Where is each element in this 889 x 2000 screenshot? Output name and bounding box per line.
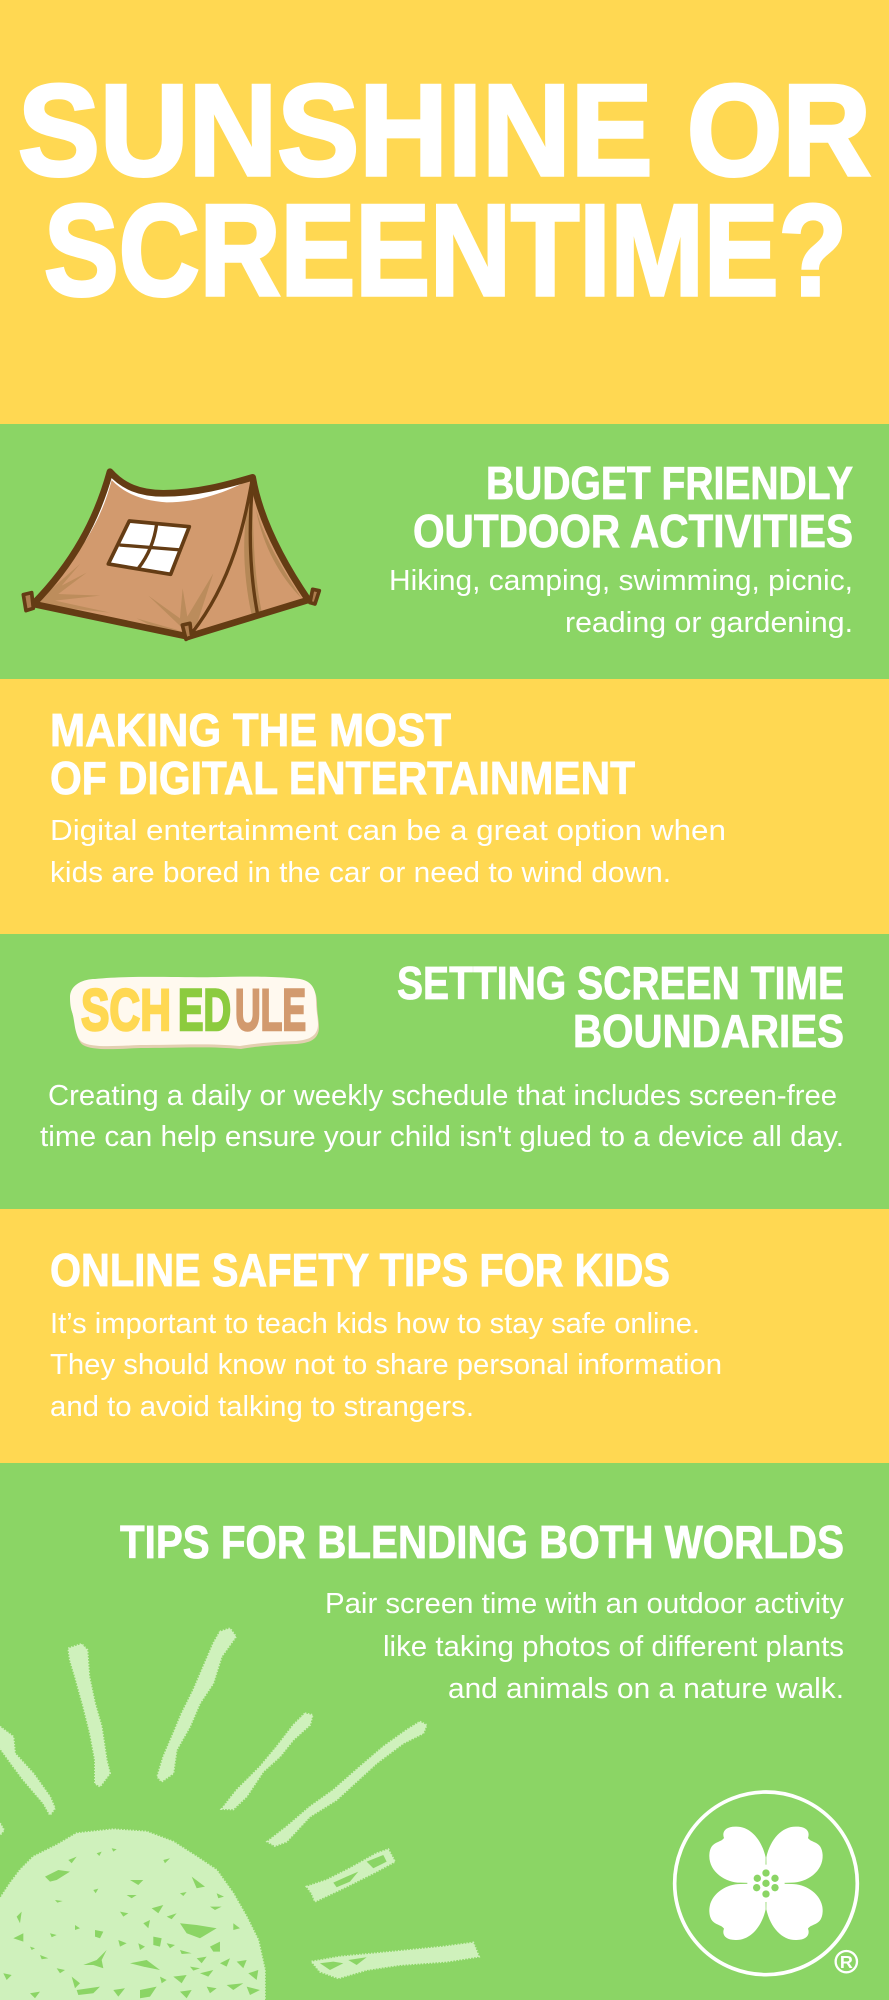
text block: like taking photos of different plants bbox=[383, 1631, 844, 1663]
text block: They should know not to share personal information bbox=[50, 1349, 722, 1381]
text block: and to avoid talking to strangers. bbox=[50, 1391, 474, 1423]
text block: and animals on a nature walk. bbox=[448, 1673, 844, 1705]
panel: title band bbox=[0, 0, 889, 424]
heading bbox=[50, 704, 635, 804]
heading: ONLINE SAFETY TIPS FOR KIDS bbox=[50, 1244, 670, 1296]
flower bbox=[709, 1827, 823, 1940]
text block: reading or gardening. bbox=[565, 607, 853, 639]
panel: tips for blending both worlds bbox=[0, 1463, 889, 2000]
icon: chalk sun bbox=[0, 1628, 479, 2000]
heading bbox=[397, 957, 844, 1057]
icon: schedule sticker: ULE bbox=[235, 978, 306, 1043]
icon: schedule sticker bbox=[70, 977, 319, 1049]
title bbox=[18, 57, 871, 323]
panel: budget friendly outdoor activities bbox=[0, 424, 889, 679]
text block: time can help ensure your child isn't glued to a device all day. bbox=[40, 1121, 844, 1153]
text block bbox=[40, 1080, 844, 1153]
heading: BOUNDARIES bbox=[573, 1005, 844, 1057]
text block: Hiking, camping, swimming, picnic, bbox=[389, 565, 853, 597]
icon: tent bbox=[23, 472, 319, 639]
icon: schedule sticker: ED bbox=[178, 978, 231, 1043]
registered mark bbox=[836, 1951, 857, 1972]
text block bbox=[389, 565, 853, 639]
text block: kids are bored in the car or need to wind down. bbox=[50, 857, 671, 889]
text block bbox=[325, 1588, 844, 1705]
text block: Pair screen time with an outdoor activity bbox=[325, 1588, 844, 1620]
flower centre dots bbox=[753, 1869, 779, 1898]
heading bbox=[413, 457, 853, 557]
panel: making the most of digital entertainment bbox=[0, 679, 889, 934]
text block: Digital entertainment can be a great option when bbox=[50, 815, 726, 847]
panel: setting screen time boundaries bbox=[0, 934, 889, 1209]
text block bbox=[50, 1308, 722, 1423]
text block: Creating a daily or weekly schedule that includes screen-free bbox=[48, 1080, 837, 1112]
heading: OF DIGITAL ENTERTAINMENT bbox=[50, 752, 635, 804]
heading: MAKING THE MOST bbox=[50, 704, 451, 756]
text block: It’s important to teach kids how to stay safe online. bbox=[50, 1308, 700, 1340]
icon: schedule sticker: SCH bbox=[81, 978, 171, 1043]
icon: dogwood logo bbox=[675, 1792, 857, 1975]
panel: online safety tips for kids bbox=[0, 1209, 889, 1463]
registered mark: R bbox=[840, 1952, 853, 1972]
text block bbox=[50, 815, 726, 889]
